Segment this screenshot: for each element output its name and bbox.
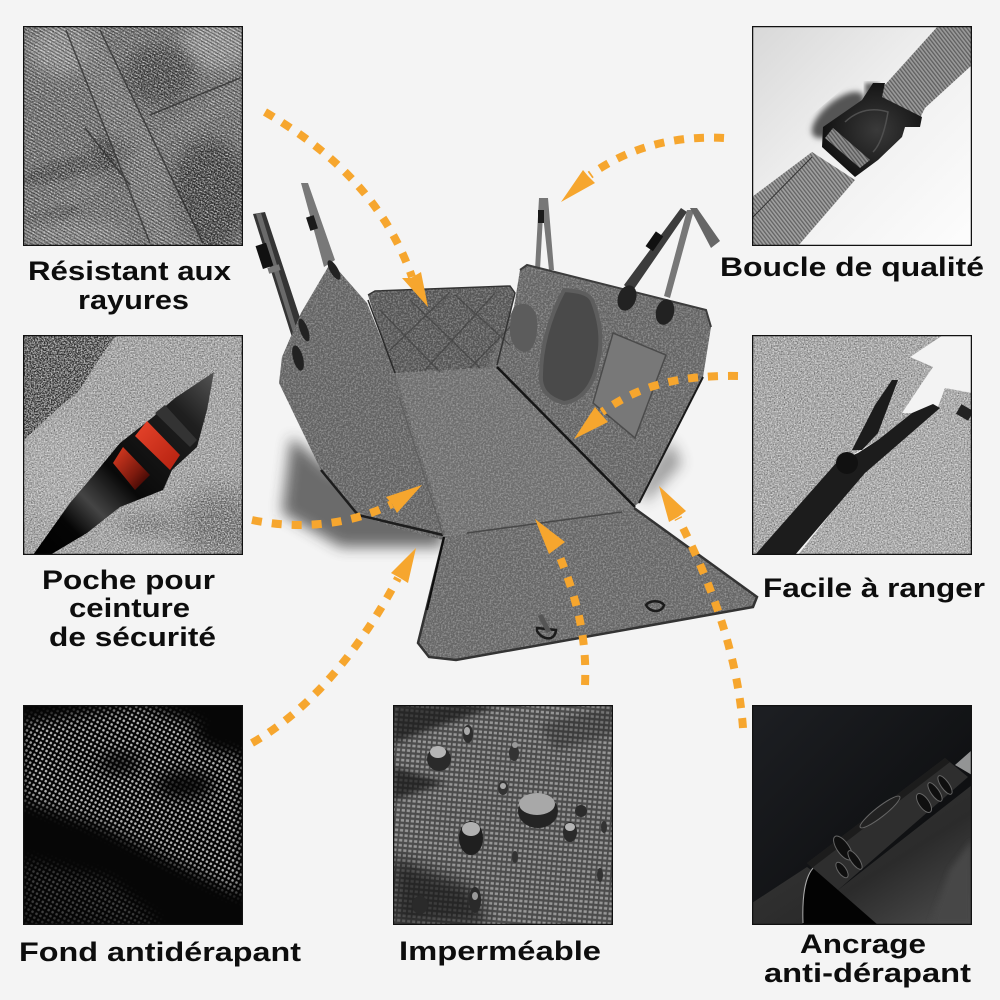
seat floor [395,367,640,550]
arrow: to non-slip backing [252,548,416,743]
clear phone pocket [593,333,666,438]
label: seat belt pocket: ceinture [69,593,190,623]
cover body [279,262,757,660]
right door panel [485,265,711,512]
straps: right [535,198,720,298]
label: waterproof: Imperméable [399,936,601,966]
label: seat belt pocket [42,565,216,652]
arrow: to scratch-resistant top [265,112,428,307]
panel: waterproof fabric photo [393,705,613,925]
label: scratch resistant [28,256,231,315]
icon: water droplets [412,725,607,914]
icon: belt slit [33,372,214,555]
panel: seat belt pocket photo [23,335,243,555]
label: non-slip backing: Fond antidérapant [19,937,301,967]
door mesh pocket [541,290,600,403]
icon: buckle [822,83,922,177]
arrow: to buckle strap [561,138,724,202]
arrow: to seat belt pocket [252,485,422,525]
shadow under the cover [282,437,682,547]
panel: scratch-resistant fabric photo [19,20,250,250]
panel: non-slip backing photo [23,705,243,925]
arrow: to anchor [659,486,743,728]
label: easy to store: Facile à ranger [763,573,986,603]
arrow: to zipper side [574,376,738,439]
label: seat belt pocket: de sécurité [49,622,216,652]
panel: zipper photo [752,335,974,555]
label: quality buckle: Boucle de qualité [720,252,984,282]
icon: zipper [755,380,974,555]
product: dog seat cover [253,183,757,660]
left door panel [279,262,460,540]
arrow: to waterproof seat [535,519,585,685]
straps: left [253,183,335,350]
icon: strap [752,26,972,246]
label: scratch resistant: Résistant aux [28,256,231,286]
label: non-slip anchor: Ancrage [800,929,926,959]
label: non-slip anchor [764,929,971,988]
label: scratch resistant: rayures [78,285,189,315]
front flap [418,508,757,660]
seat back panel [368,286,515,380]
panel: non-slip anchor photo [752,705,972,925]
icon: anchor tube [807,758,968,890]
quilting and details [321,265,757,660]
rolled pillow on door [510,304,537,352]
strap anchors [290,258,677,372]
panel: quality buckle photo [752,26,972,246]
D-rings [537,601,664,638]
icon: anchor hole [803,866,878,925]
label: non-slip anchor: anti-dérapant [764,958,971,988]
label: seat belt pocket: Poche pour [42,565,216,595]
